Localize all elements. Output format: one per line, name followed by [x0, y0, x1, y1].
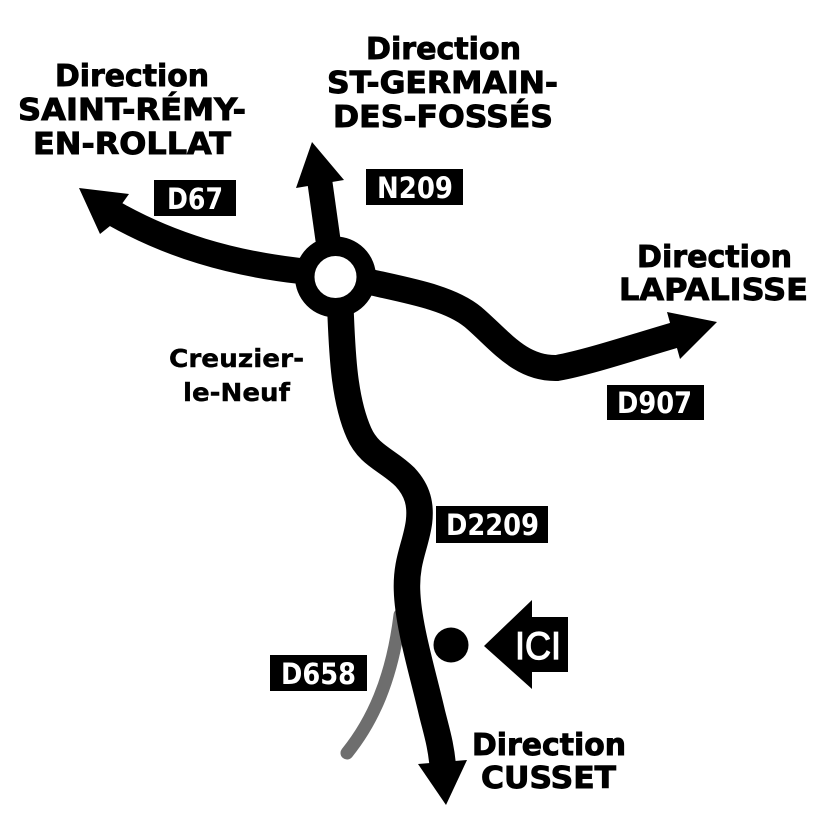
label: D67: D67 — [167, 182, 223, 216]
roundabout — [305, 246, 366, 308]
road: D67 west — [79, 188, 300, 271]
label: D907: D907 — [617, 386, 692, 420]
road: D907 east — [370, 282, 717, 368]
road: D658 grey branch — [347, 615, 400, 753]
location dot — [434, 628, 468, 662]
heading: Saint-Rémy: Direction — [55, 59, 209, 94]
label: N209: N209 — [377, 171, 453, 205]
arrowhead: Cusset — [418, 760, 467, 805]
heading: Lapalisse: Direction — [637, 240, 792, 275]
road: D2209 south to Cusset — [340, 300, 467, 805]
label: D658: D658 — [281, 657, 356, 691]
heading: Saint-Germain — [327, 32, 558, 135]
text: Creuzier-le-Neuf — [169, 344, 304, 407]
road: N209 north — [296, 142, 344, 240]
heading: Saint-Germain: DES-FOSSÉS — [333, 99, 553, 135]
heading: Lapalisse — [619, 240, 808, 308]
text: Creuzier-le-Neuf: Creuzier- — [169, 344, 304, 373]
heading: Saint-Rémy — [18, 59, 246, 162]
heading: Saint-Rémy: EN-ROLLAT — [33, 127, 232, 162]
heading: Saint-Rémy: SAINT-RÉMY- — [18, 92, 246, 128]
heading: Lapalisse: LAPALISSE — [619, 273, 808, 308]
heading: Saint-Germain: ST-GERMAIN- — [327, 66, 558, 101]
callout: ICI arrow: ICI — [515, 625, 561, 668]
heading: Cusset: CUSSET — [481, 761, 617, 796]
arrowhead: Saint-Rémy — [79, 188, 129, 234]
arrowhead: Lapalisse — [667, 312, 717, 359]
callout: ICI arrow — [484, 600, 568, 689]
label: D2209: D2209 — [446, 508, 539, 542]
text: Creuzier-le-Neuf: le-Neuf — [183, 378, 291, 407]
heading: Cusset: Direction — [472, 728, 626, 763]
arrowhead: Saint-Germain — [296, 142, 344, 188]
heading: Saint-Germain: Direction — [366, 32, 521, 67]
heading: Cusset — [472, 728, 626, 796]
